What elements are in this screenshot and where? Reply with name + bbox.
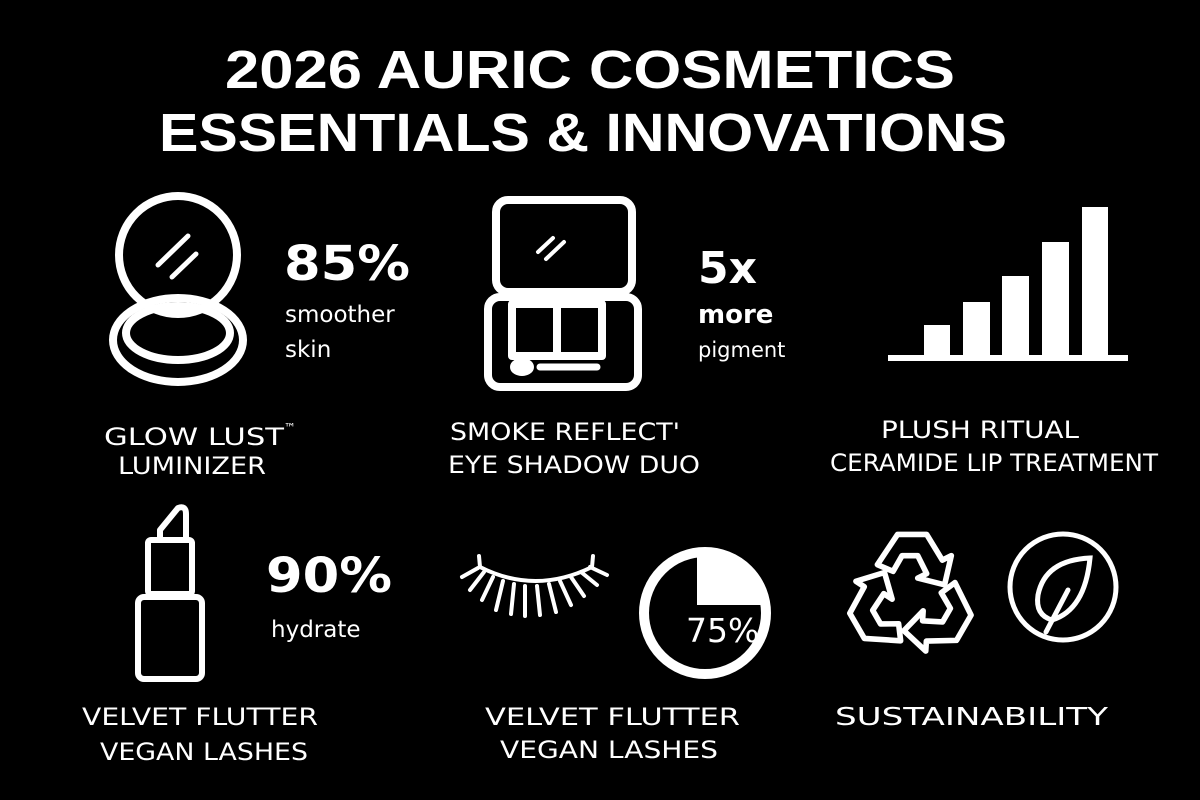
label (485, 703, 740, 764)
stat: 5x (698, 243, 785, 362)
icon: recycle (837, 534, 981, 662)
label: ™ (284, 421, 296, 435)
panel: lashes (462, 552, 766, 764)
label (830, 416, 1158, 477)
icon: lipstick (138, 507, 202, 679)
panel: sustainability (835, 534, 1116, 731)
label: CERAMIDE LIP TREATMENT (830, 449, 1158, 477)
title: 2026 AURIC COSMETICS (225, 40, 955, 100)
stat: 90% (266, 548, 392, 643)
icon: eyelash (462, 556, 607, 616)
label: VEGAN LASHES (100, 738, 308, 766)
label: SUSTAINABILITY (835, 702, 1109, 731)
chart: 75% pie: 75% (686, 611, 759, 650)
stat: 85% (284, 236, 410, 363)
label (82, 703, 318, 766)
stat: 5x: more (698, 300, 773, 330)
label (448, 418, 700, 479)
icon: compact mirror (113, 196, 243, 382)
label: EYE SHADOW DUO (448, 451, 700, 479)
stat: 90%: hydrate (271, 617, 361, 643)
panel: glow lust (104, 196, 410, 480)
label: GLOW LUST (104, 423, 284, 451)
label: PLUSH RITUAL (881, 416, 1080, 444)
title (159, 40, 1007, 163)
panel: lipstick (82, 507, 392, 766)
stat: 5x: pigment (698, 338, 785, 362)
label: LUMINIZER (118, 452, 266, 480)
panel: plush ritual (830, 207, 1158, 477)
chart: 75% pie (644, 552, 766, 674)
stat: 85%: skin (285, 337, 331, 363)
label: SMOKE REFLECT' (450, 418, 680, 446)
label: VELVET FLUTTER (82, 703, 318, 731)
stat: 85%: smoother (285, 302, 395, 328)
icon: eye shadow palette (488, 200, 638, 387)
stat: 5x: 5x (698, 243, 757, 294)
label (104, 421, 296, 480)
stat: 85%: 85% (284, 236, 410, 292)
icon: leaf (1010, 534, 1116, 640)
bar chart (888, 207, 1128, 361)
title: ESSENTIALS & INNOVATIONS (159, 103, 1007, 163)
stat: 90%: 90% (266, 548, 392, 604)
label: VEGAN LASHES (500, 736, 718, 764)
label: VELVET FLUTTER (485, 703, 740, 731)
panel: smoke reflect (448, 200, 785, 479)
